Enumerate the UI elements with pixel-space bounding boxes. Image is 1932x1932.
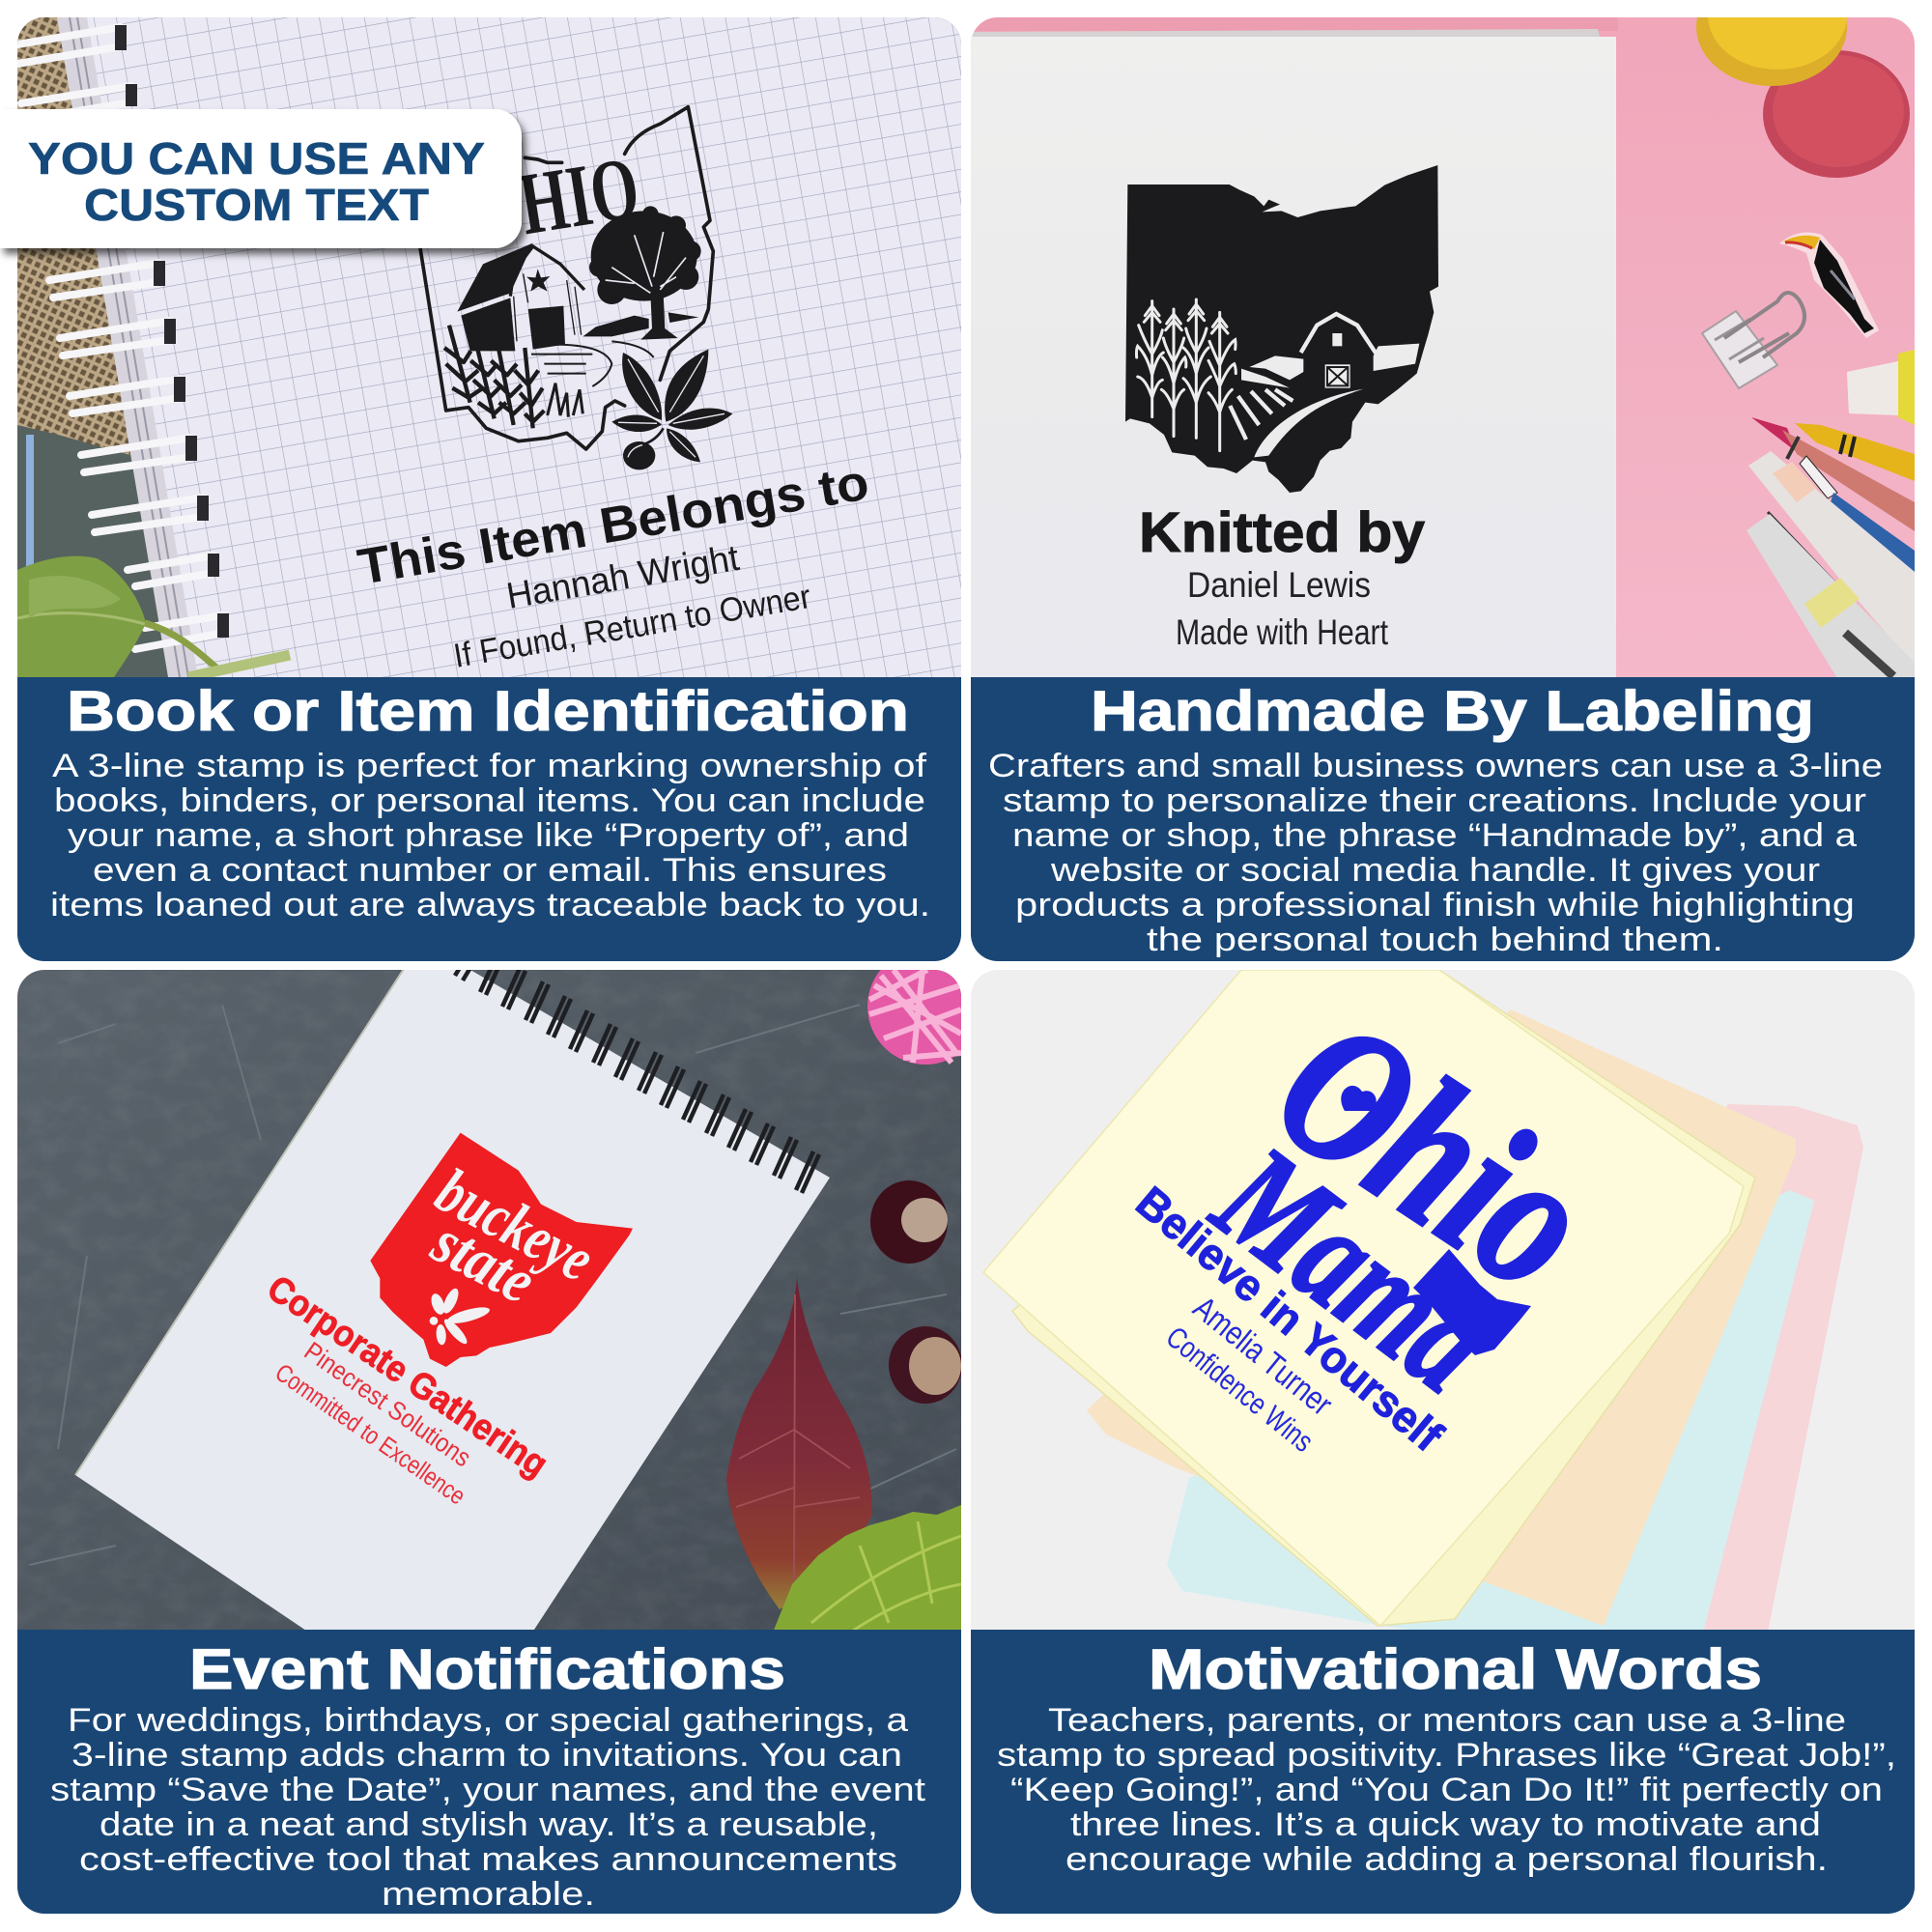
text: motivational description: “Keep Going!”, and “You Can Do It!” fit perfectly on <box>1010 1772 1883 1808</box>
text: book description: A 3-line stamp is perfect for marking ownership of <box>52 748 927 784</box>
stamp line 3: Committed to Excellence <box>270 1357 471 1511</box>
red macaron <box>1763 50 1910 178</box>
heading: book: Book or Item Identification <box>67 680 909 743</box>
stamp line 3: If Found, Return to Owner <box>451 578 813 675</box>
toucan sticker <box>1779 232 1879 338</box>
stamp: small Ohio shape <box>1413 1249 1531 1355</box>
stamp line 2: Amelia Turner <box>1186 1290 1339 1423</box>
heading: handmade: Handmade By Labeling <box>1091 680 1814 743</box>
basil leaf <box>17 556 290 677</box>
red leaf <box>726 1277 871 1609</box>
stamp line 1: Believe in Yourself <box>1127 1177 1453 1462</box>
barn and fields <box>1230 314 1419 457</box>
text: handmade description: products a professional finish while highlighting <box>1015 887 1855 923</box>
stamp buckeye leaves <box>611 350 732 469</box>
text: handmade description: name or shop, the phrase “Handmade by”, and a <box>1012 817 1857 854</box>
text: motivational description <box>997 1702 1896 1878</box>
white spiral notebook <box>75 952 830 1633</box>
stamp script word 2: state <box>420 1206 547 1318</box>
spiral binding rings <box>17 25 223 649</box>
text: motivational description: encourage while adding a personal flourish. <box>1065 1841 1828 1878</box>
photo: white sheet on pink desk <box>971 0 1915 696</box>
text: event description: memorable. <box>382 1876 595 1913</box>
glue tube <box>1847 350 1915 425</box>
yellow macaron <box>1696 17 1847 86</box>
stamp: Ohio farm outline <box>420 107 732 469</box>
text: book description: your name, a short phrase like “Property of”, and <box>68 817 909 854</box>
pink wicker ball <box>867 970 961 1065</box>
callout: you can use any custom text: CUSTOM TEXT <box>84 180 429 230</box>
text: book description: even a contact number or email. This ensures <box>93 852 887 889</box>
stamp script word 1: Ohio <box>1240 974 1628 1333</box>
stamp line 1: Knitted by <box>1139 501 1425 564</box>
blue sheets <box>1167 1190 1814 1633</box>
stamp line 3: Confidence Wins <box>1160 1320 1320 1459</box>
stamp corn rows <box>444 326 544 428</box>
caption box: book <box>17 677 961 961</box>
callout: you can use any custom text <box>0 109 522 248</box>
photo: notebook on slate <box>17 949 983 1646</box>
callout: you can use any custom text: YOU CAN USE ANY <box>28 133 485 184</box>
text: handmade description: Crafters and small business owners can use a 3-line <box>988 748 1883 784</box>
blue pencil <box>1799 455 1915 572</box>
stamp: red Ohio shape <box>370 1133 633 1367</box>
text: book description: books, binders, or personal items. You can include <box>54 782 925 819</box>
photo: pastel paper stack <box>971 970 1915 1646</box>
yellow under sheets <box>1012 970 1755 1626</box>
caption box: event <box>17 1630 961 1914</box>
text: event description: 3-line stamp adds charm to invitations. You can <box>71 1737 902 1774</box>
paint markers <box>1747 451 1915 696</box>
stamp line 2: Hannah Wright <box>503 538 743 617</box>
chestnuts <box>870 1180 962 1404</box>
text: motivational description: stamp to spread positivity. Phrases like “Great Job!”, <box>997 1737 1896 1774</box>
stamp wordmark: OHIO <box>467 137 645 261</box>
caption box: motivational <box>971 1630 1915 1914</box>
corn cut-outs <box>1136 299 1236 451</box>
green leaf <box>773 1505 961 1633</box>
stamp line 2: Pinecrest Solutions <box>299 1336 476 1472</box>
heading: motivational: Motivational Words <box>1149 1638 1762 1701</box>
text: event description: For weddings, birthdays, or special gatherings, a <box>68 1702 908 1739</box>
heading: event: Event Notifications <box>189 1638 785 1701</box>
icon: heart <box>1341 1086 1377 1111</box>
stamp line 2: Daniel Lewis <box>1187 565 1371 605</box>
panel: motivational words <box>971 970 1915 1914</box>
text: event description: stamp “Save the Date”, your names, and the event <box>50 1772 926 1808</box>
text: event description: date in a neat and stylish way. It’s a reusable, <box>99 1806 878 1843</box>
stamp line 3: Made with Heart <box>1176 612 1389 652</box>
white buckeye leaf <box>429 1287 491 1347</box>
text: event description: cost-effective tool that makes announcements <box>79 1841 897 1878</box>
text: motivational description: Teachers, parents, or mentors can use a 3-line <box>1048 1702 1846 1739</box>
pink sheets <box>1642 1104 1863 1633</box>
panel: handmade by labeling <box>971 0 1915 961</box>
stamp line 1: Corporate Gathering <box>260 1268 554 1486</box>
stamp: solid Ohio with farm <box>1125 165 1438 493</box>
text: handmade description: the personal touch behind them. <box>1147 922 1723 958</box>
panel: event notifications <box>17 949 983 1914</box>
photo: spiral grid notebook <box>17 17 961 694</box>
text: handmade description <box>988 748 1883 958</box>
text: handmade description: website or social media handle. It gives your <box>1050 852 1820 889</box>
stamp line 1: This Item Belongs to <box>354 454 873 596</box>
peach sheets <box>1087 1009 1796 1626</box>
text: book description: items loaned out are always traceable back to you. <box>50 887 930 923</box>
text: event description <box>50 1702 926 1913</box>
stamp script word 2: Mama <box>1187 1116 1520 1422</box>
caption box: handmade <box>971 677 1915 961</box>
text: motivational description: three lines. It’s a quick way to motivate and <box>1070 1806 1821 1843</box>
stamp script word 1: buckeye <box>425 1155 605 1295</box>
crayons <box>1751 417 1915 531</box>
text: book description <box>50 748 930 923</box>
panel: book or item identification <box>17 17 961 961</box>
yellow front sheet <box>983 970 1744 1626</box>
text: handmade description: stamp to personalize their creations. Include your <box>1003 782 1866 819</box>
binder clip <box>1702 293 1804 388</box>
